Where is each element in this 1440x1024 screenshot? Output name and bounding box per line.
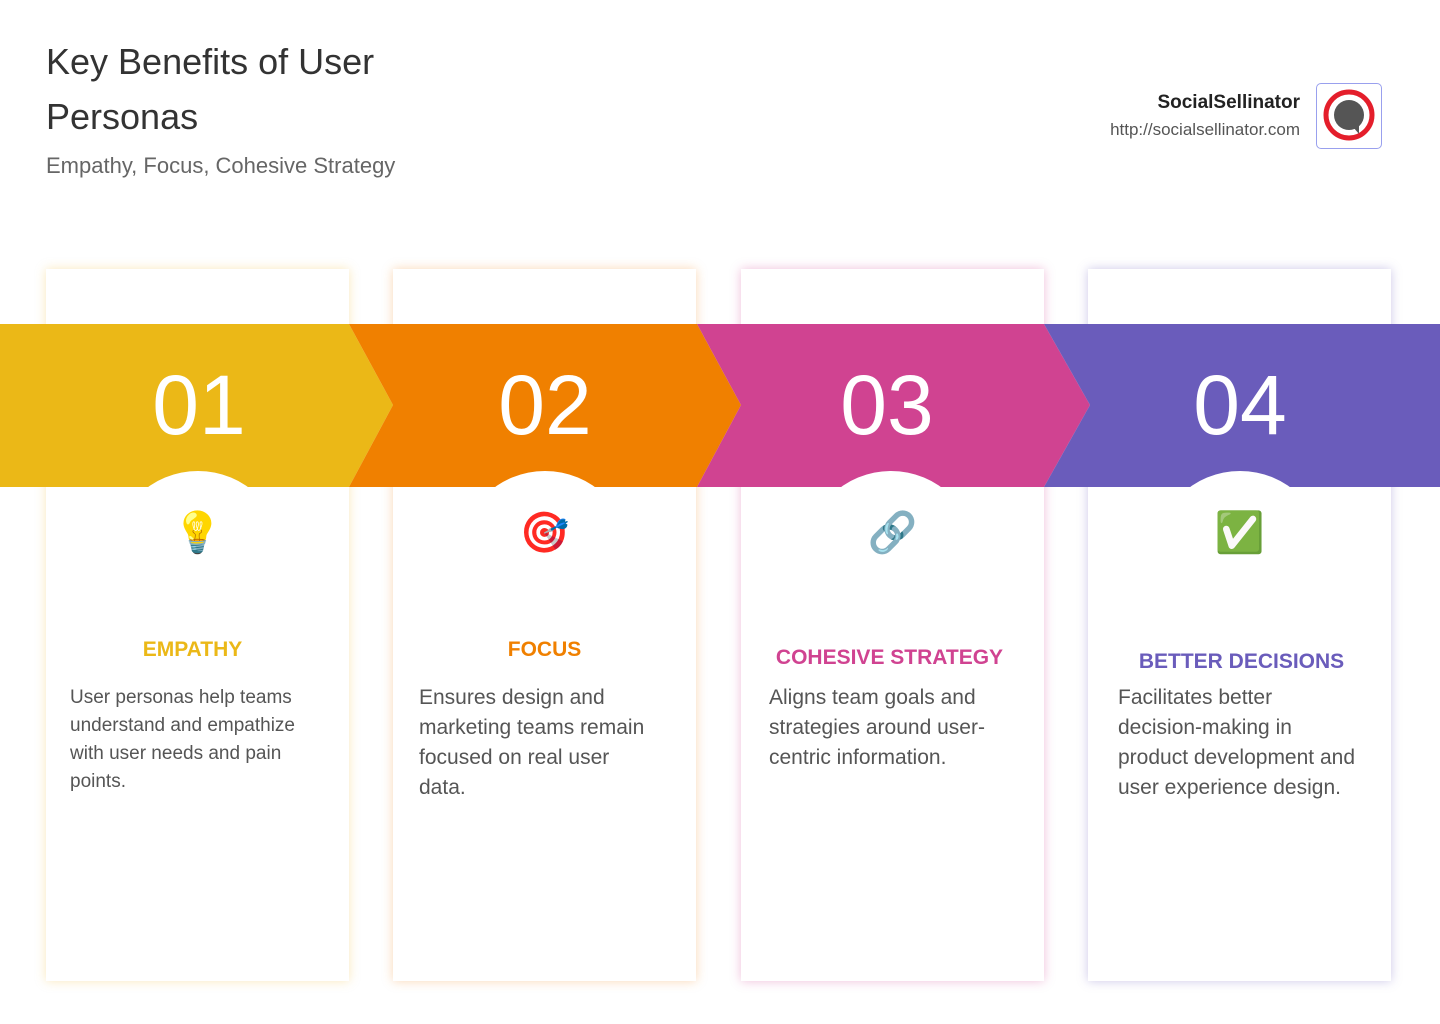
title: Key Benefits of User Personas (46, 41, 374, 137)
icon: bulb: 💡 (173, 509, 222, 556)
arrow band: 03 (840, 358, 934, 452)
brand: http://socialsellinator.com (1110, 120, 1300, 139)
card 3 (741, 269, 1044, 981)
body: Ensures design and marketing teams remain focused on real user data. (419, 686, 644, 799)
arrow band: 02 (498, 358, 592, 452)
brand (1110, 92, 1300, 139)
arrow band: 04 (1193, 358, 1287, 452)
arrow band: 01 (152, 358, 246, 452)
body: product development and (1118, 746, 1355, 769)
card 2 (393, 269, 696, 981)
body: Aligns team goals and strategies around user-centric information. (769, 686, 985, 769)
card 1 (46, 269, 349, 981)
body: decision-making in (1118, 716, 1292, 739)
icon: link: 🔗 (868, 509, 917, 556)
card 4 (1088, 269, 1391, 981)
body (1118, 686, 1355, 799)
panel 2 content (419, 509, 644, 799)
brand: SocialSellinator (1157, 92, 1300, 113)
heading: BETTER DECISIONS (1139, 650, 1344, 673)
icon: target: 🎯 (520, 509, 569, 556)
panel 1 content (70, 509, 295, 792)
heading: FOCUS (508, 638, 581, 661)
heading: EMPATHY (143, 638, 242, 661)
panel 4 content (1118, 509, 1355, 799)
body: User personas help teams understand and empathize with user needs and pain points. (70, 687, 295, 792)
icon: check: ✅ (1215, 509, 1264, 556)
body: user experience design. (1118, 776, 1341, 799)
panel 3 content (769, 509, 1003, 769)
subtitle: Empathy, Focus, Cohesive Strategy (46, 153, 395, 178)
body: Facilitates better (1118, 686, 1272, 709)
heading: COHESIVE STRATEGY (776, 646, 1003, 669)
logo (1316, 83, 1382, 149)
